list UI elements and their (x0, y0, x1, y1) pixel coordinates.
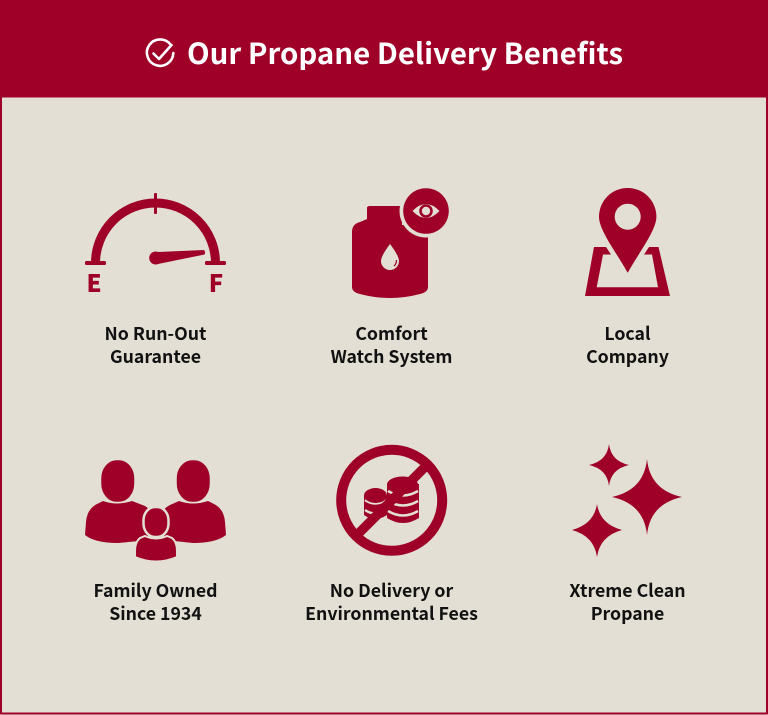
icon: sparkles (572, 444, 682, 557)
icon: family (85, 460, 226, 562)
label: xtreme clean: Propane (591, 600, 664, 626)
label: local company (586, 320, 669, 369)
label: comfort watch (331, 320, 452, 369)
icon: title check (147, 39, 173, 66)
icon: fuel gauge: E (86, 264, 102, 299)
label: no run-out (105, 320, 207, 369)
label: no run-out: No Run-Out (105, 320, 207, 346)
icon: fuel gauge (85, 193, 226, 299)
label: no delivery fees (305, 577, 478, 626)
icon: fuel gauge: F (209, 264, 223, 299)
label: comfort watch: Comfort (355, 320, 428, 346)
title: Our Propane Delivery Benefits (187, 31, 623, 73)
header band (0, 0, 768, 98)
label: xtreme clean (569, 577, 686, 626)
label: no delivery fees: Environmental Fees (305, 600, 478, 626)
label: no delivery fees: No Delivery or (330, 577, 453, 603)
label: local company: Local (604, 320, 651, 346)
label: family owned: Since 1934 (109, 600, 202, 626)
label: family owned: Family Owned (93, 577, 218, 603)
label: family owned (93, 577, 218, 626)
label: local company: Company (586, 343, 669, 369)
icon: tank with eye (352, 184, 452, 298)
icon: no fees (341, 450, 442, 551)
label: xtreme clean: Xtreme Clean (569, 577, 686, 603)
icon: map pin (585, 188, 670, 296)
label: no run-out: Guarantee (110, 343, 201, 369)
label: comfort watch: Watch System (331, 343, 452, 369)
